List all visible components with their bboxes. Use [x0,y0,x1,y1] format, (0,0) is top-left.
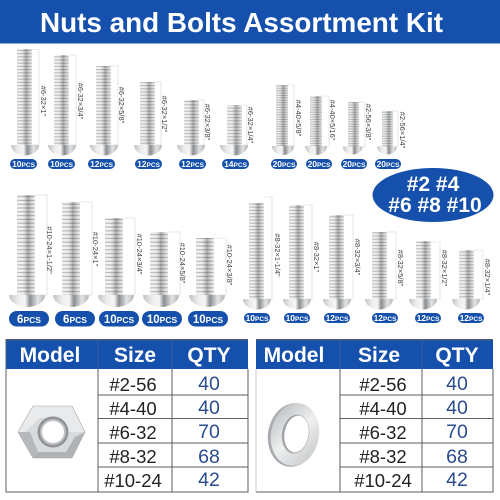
size callout oval: #2 #4 [407,173,460,196]
bolt: #6-32×1": 10PCS [12,159,36,169]
bolt: #8-32×3/4" [323,215,362,323]
size callout oval: #6 #8 #10 [388,194,482,217]
table: nuts: 40 [198,397,220,419]
bolt: #8-32×1-1/4" [243,197,282,323]
bolt: #10-24×1" [53,202,100,326]
bolt: #8-32×1": 10PCS [286,313,309,323]
bolt: #6-32×1/2": 12PCS [137,159,161,169]
table: washers: #6-32 [359,422,407,443]
bolt: #10-24×3/4": 10PCS [104,314,134,326]
bolt: #8-32×1/2": #8-32×1/2" [440,250,449,287]
bolt: #6-32×1/4": #6-32×1/4" [246,107,255,144]
bolt: #6-32×5/8": 12PCS [90,159,114,169]
bolt: #2-56×3/8": 20PCS [343,159,366,169]
table: washers: 42 [446,469,468,491]
table: washers: #10-24 [354,470,412,491]
bolt: #8-32×5/8" [365,232,405,323]
title banner: Nuts and Bolts Assortment Kit [40,7,443,38]
table: washers: #8-32 [359,446,407,467]
bolt: #8-32×1/4" [452,250,492,323]
bolt: #8-32×1": #8-32×1" [312,242,321,273]
bolt: #2-56×1/4": #2-56×1/4" [398,112,407,149]
table: nuts: 40 [198,373,220,395]
bolt: #4-40×5/8": #4-40×5/8" [294,100,303,137]
bolt: #10-24×1": 6PCS [63,314,87,326]
bolt: #6-32×3/4": #6-32×3/4" [76,83,85,120]
bolt: #8-32×1-1/4": #8-32×1-1/4" [273,233,282,277]
table: nuts: #8-32 [109,446,157,467]
table: washers: #4-40 [359,398,407,419]
bolt: #10-24×3/8": 10PCS [193,314,223,326]
bolt: #4-40×5/8" [271,85,303,169]
table: nuts: 68 [198,446,220,468]
table: nuts [6,339,248,492]
bolt: #6-32×3/4": 10PCS [50,159,74,169]
table: washers: 68 [446,446,468,468]
table: washers: 40 [446,397,468,419]
bolt: #4-40×5/16" [305,96,337,169]
bolt: #6-32×5/8" [88,66,126,169]
table: washers: 40 [446,373,468,395]
table header: nuts [6,339,248,369]
bolt: #10-24×5/8": 10PCS [147,314,177,326]
bolt: #4-40×5/8": 20PCS [273,159,296,169]
bolt: #6-32×1/2" [134,82,169,169]
size callout oval [372,168,494,222]
bolt: #2-56×3/8" [341,102,373,169]
bolt: #8-32×1" [283,205,321,323]
icon: hex nut [18,406,85,458]
icon: flat washer [263,399,324,471]
bolt: #2-56×3/8": #2-56×3/8" [364,104,373,141]
table: nuts: #4-40 [109,398,157,419]
bolt: #10-24×3/4" [98,218,144,326]
table: nuts: #6-32 [109,422,157,443]
bolt: #2-56×1/4": 20PCS [377,159,400,169]
bolt: #10-24×1": #10-24×1" [91,232,100,267]
table: nuts: Size [114,344,156,367]
bolt: #6-32×1": #6-32×1" [39,86,48,117]
table: washers: Size [358,344,400,367]
bolt: #10-24×5/8": #10-24×5/8" [178,243,187,284]
table: nuts: #2-56 [109,374,157,395]
bolt: #10-24×3/8" [188,238,234,326]
bolt: #10-24×1-1/2": #10-24×1-1/2" [45,226,54,274]
bolt: #8-32×5/8": 12PCS [374,313,397,323]
table: washers: Model [264,344,324,367]
table: nuts: 42 [198,469,220,491]
bolt: #4-40×5/16": #4-40×5/16" [328,100,337,141]
table: nuts: 70 [198,421,220,443]
bolt: #10-24×1-1/2": 6PCS [17,314,41,326]
bolt: #8-32×1-1/4": 10PCS [246,313,269,323]
bolt: #8-32×5/8": #8-32×5/8" [396,250,405,287]
bolt: #8-32×1/4": 12PCS [460,313,483,323]
table: washers [256,339,493,492]
bolt: #8-32×3/4": #8-32×3/4" [353,239,362,276]
table: nuts: QTY [187,344,231,367]
bolt: #10-24×3/8": #10-24×3/8" [225,245,234,286]
bolt: #6-32×3/8": 12PCS [181,159,205,169]
bolt: #2-56×1/4" [375,111,407,169]
table: washers: 70 [446,421,468,443]
bolt: #8-32×3/4": 12PCS [326,313,349,323]
bolt: #4-40×5/16": 20PCS [308,159,331,169]
bolt: #8-32×1/2": 12PCS [417,313,440,323]
bolt: #6-32×5/8": #6-32×5/8" [117,87,126,124]
bolt: #6-32×3/8" [177,100,212,169]
bolt: #8-32×1/4": #8-32×1/4" [483,259,492,296]
table header: washers [256,339,493,369]
bolt: #6-32×1/4" [220,105,255,169]
bolt: #8-32×1/2" [409,241,449,323]
bolt: #10-24×3/4": #10-24×3/4" [135,234,144,275]
table: washers: #2-56 [359,374,407,395]
bolt: #10-24×1-1/2" [9,195,54,326]
bolt: #6-32×1/2": #6-32×1/2" [160,96,169,133]
table: nuts: Model [20,344,80,367]
bolt: #10-24×5/8" [142,232,187,326]
bolt: #6-32×3/8": #6-32×3/8" [203,104,212,141]
bolt: #6-32×3/4" [48,55,85,169]
table: washers: QTY [435,344,479,367]
table: nuts: #10-24 [104,470,162,491]
bolt: #6-32×1/4": 14PCS [224,159,248,169]
bolt: #6-32×1" [10,49,48,169]
title banner [0,0,500,44]
